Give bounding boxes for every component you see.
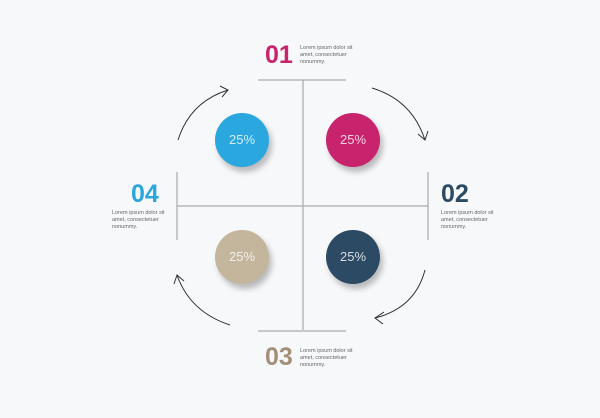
circle 25% navy xyxy=(326,230,380,284)
circle 25% navy: 25% xyxy=(340,249,366,264)
label 01: 01 xyxy=(265,41,293,69)
circle 25% tan xyxy=(215,230,269,284)
circle 25% magenta xyxy=(326,113,380,167)
circle 25% blue: 25% xyxy=(229,132,255,147)
circle 25% magenta: 25% xyxy=(340,132,366,147)
text 02: Lorem ipsum dolor sit amet, consectetuer nonummy. xyxy=(441,210,494,230)
circle 25% blue xyxy=(215,113,269,167)
label 04: 04 xyxy=(131,180,159,208)
label 02: 02 xyxy=(441,180,469,208)
text 04: Lorem ipsum dolor sit amet, consectetuer nonummy. xyxy=(112,210,165,230)
circle 25% tan: 25% xyxy=(229,249,255,264)
text 03: Lorem ipsum dolor sit amet, consectetuer nonummy. xyxy=(300,348,353,368)
label 03: 03 xyxy=(265,343,293,371)
text 01: Lorem ipsum dolor sit amet, consectetuer nonummy. xyxy=(300,45,353,65)
